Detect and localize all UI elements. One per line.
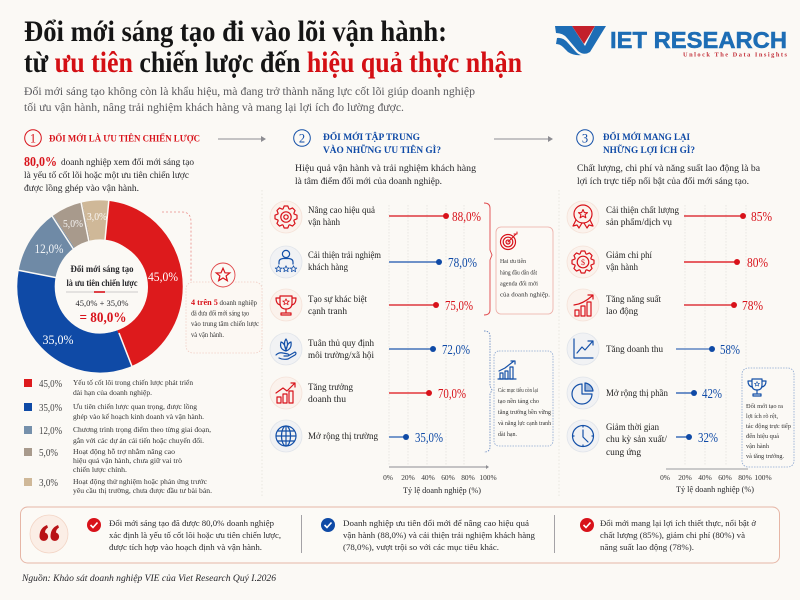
legend: gắn với các dự án cải tiến hoặc chuyển đổi.	[73, 436, 204, 445]
text block: 80% intro: được lồng ghép vào vận hành.	[24, 183, 139, 193]
chart row: cycle time 32%: Giảm thời gian	[606, 422, 659, 433]
title: Đổi mới sáng tạo đi vào lõi vận hành:	[24, 15, 447, 48]
axis: section 2: 20%	[401, 473, 415, 482]
donut chart: 45,0%	[148, 269, 178, 284]
title	[24, 15, 522, 79]
chart row: revenue growth 70%: Tăng trưởng	[308, 382, 353, 393]
donut chart: 45,0% + 35,0%	[76, 298, 129, 308]
callout: remaining goals	[494, 351, 553, 446]
chart row: market expansion 35%: Mở rộng thị trường	[308, 431, 378, 442]
source note: Nguồn: Khảo sát doanh nghiệp VIE của Viet Research Quý I.2026	[21, 573, 276, 584]
takeaway 3: chất lượng (85%), giảm chi phí (80%) và	[600, 530, 745, 540]
chart row: productivity 78%: lao động	[606, 306, 638, 317]
chart row: cycle time 32%: cung ứng	[606, 447, 641, 458]
chart row: competitive differentiation 75%	[270, 289, 473, 321]
chart row: market share 42%	[567, 377, 722, 409]
legend: Ưu tiên chiến lược quan trọng, được lồng	[73, 403, 197, 411]
legend: 3,0%	[39, 478, 58, 489]
takeaway 1: xác định là yếu tố cốt lõi hoặc ưu tiên chiến lược,	[109, 530, 281, 540]
callout: innovation creates clear benefits: vận hành	[746, 444, 769, 450]
axis: section 3: Tỷ lệ doanh nghiệp (%)	[676, 484, 754, 494]
heading: section 3: NHỮNG LỢI ÍCH GÌ?	[603, 143, 695, 156]
chart row: quality 85%: sản phẩm/dịch vụ	[606, 217, 672, 228]
legend: 45,0%	[39, 379, 62, 390]
chart row: customer experience 78%: khách hàng	[308, 262, 348, 273]
axis: section 3: 0%	[660, 473, 670, 482]
callout: remaining goals: Các mục tiêu còn lại	[498, 387, 538, 394]
donut chart: là ưu tiên chiến lược	[66, 278, 138, 288]
legend: yêu cầu thị trường, chưa được đầu tư bài bản.	[73, 487, 212, 495]
donut chart: = 80,0%	[80, 310, 126, 326]
chart row: productivity 78%: Tăng năng suất	[606, 294, 661, 305]
logo: Viet Research: Unlock The Data Insights	[683, 52, 788, 58]
text block: section 3 description	[577, 163, 761, 187]
chart row: cycle time 32%	[567, 420, 718, 458]
callout: innovation creates clear benefits: tác động trực tiếp	[746, 423, 791, 430]
takeaway 1	[87, 518, 281, 552]
takeaway 3: năng suất lao động (78%).	[600, 542, 694, 552]
donut chart	[17, 199, 178, 369]
chart row: cost 80%: 80%	[747, 255, 768, 270]
callout: top two priorities: Hai ưu tiên	[500, 258, 527, 265]
chart row: revenue growth 70%	[270, 377, 466, 409]
text block: 80% intro: là yếu tố cốt lõi hoặc một ưu tiên chiến lược	[24, 170, 189, 180]
axis: section 3	[660, 469, 772, 494]
chart row: revenue 58%	[567, 333, 740, 365]
text block: section 2 description: Hiệu quả vận hành và trải nghiệm khách hàng	[295, 164, 476, 174]
chart row: customer experience 78%	[270, 246, 477, 278]
takeaway 3	[580, 518, 756, 552]
text block: 80% intro	[24, 155, 195, 193]
axis: section 2	[383, 465, 497, 495]
axis: section 2: 100%	[479, 473, 497, 482]
chart row: competitive differentiation 75%: Tạo sự khác biệt	[308, 294, 367, 305]
logo: Viet Research	[555, 26, 788, 58]
legend: Yếu tố cốt lõi trong chiến lược phát triển	[73, 378, 193, 387]
title: từ ưu tiên chiến lược đến hiệu quả thực nhận	[24, 46, 522, 79]
bracket: remaining goals	[484, 331, 492, 452]
takeaway 2	[321, 518, 536, 552]
callout: top two priorities: của doanh nghiệp.	[500, 292, 550, 298]
donut chart: 3,0%	[87, 211, 107, 223]
text block: section 3 description: Chất lượng, chi phí và năng suất lao động là ba	[577, 163, 761, 174]
heading: section 2: VÀO NHỮNG ƯU TIÊN GÌ?	[323, 143, 441, 156]
chart row: cycle time 32%: chu kỳ sản xuất/	[606, 434, 667, 445]
callout: top two priorities: agenda đổi mới	[500, 280, 538, 288]
chart row: competitive differentiation 75%: cạnh tranh	[308, 306, 347, 317]
callout: innovation creates clear benefits: đến hiệu quả	[746, 433, 779, 440]
chart row: productivity 78%: 78%	[742, 298, 763, 313]
chart row: regulatory compliance 72%: môi trường/xã hội	[308, 350, 374, 361]
chart row: market share 42%: 42%	[702, 386, 722, 401]
chart row: quality 85%: Cải thiện chất lượng	[606, 205, 679, 216]
takeaway 1: Đổi mới sáng tạo đã được 80,0% doanh nghiệp	[109, 518, 275, 528]
subtitle: Đổi mới sáng tạo không còn là khẩu hiệu, mà đang trở thành năng lực cốt lõi giúp doanh nghiệp	[24, 85, 475, 98]
donut chart: 35,0%	[42, 332, 74, 347]
callout: 4 of 5 businesses: và vận hành.	[191, 331, 224, 339]
chart row: revenue 58%: Tăng doanh thu	[606, 344, 663, 355]
heading: section 2	[294, 130, 441, 156]
panel: section 1 strategic priority	[17, 130, 262, 495]
axis: section 3: 80%	[738, 473, 752, 482]
legend: Hoạt động hỗ trợ nhằm nâng cao	[73, 447, 175, 456]
panel: key takeaways	[20, 507, 780, 563]
arrow: section 1 to 2	[218, 136, 266, 142]
chart row: cost 80%	[567, 246, 768, 278]
chart row: productivity 78%	[567, 289, 763, 321]
heading: section 3	[577, 130, 695, 156]
takeaway 1: được tích hợp vào hoạch định và vận hành.	[109, 542, 262, 552]
callout: 4 of 5 businesses: đã đưa đổi mới sáng tạo	[191, 310, 249, 318]
heading: section 2: ĐỔI MỚI TẬP TRUNG	[323, 130, 420, 143]
chart row: cycle time 32%: 32%	[698, 430, 718, 445]
legend: ghép vào kế hoạch kinh doanh và vận hành.	[73, 413, 204, 421]
chart row: market expansion 35%	[270, 420, 443, 452]
heading: section 3: ĐỔI MỚI MANG LẠI	[603, 130, 690, 143]
legend	[24, 378, 212, 495]
callout: remaining goals: tạo nền tảng cho	[498, 398, 539, 405]
callout: 4 of 5 businesses: 4 trên 5 doanh nghiệp	[191, 297, 257, 307]
axis: section 3: 100%	[754, 473, 772, 482]
chart row: quality 85%	[567, 201, 772, 233]
chart row: revenue 58%: 58%	[720, 342, 740, 357]
donut chart: 5,0%	[63, 218, 83, 230]
chart row: operational efficiency 88%	[270, 201, 481, 233]
chart row: cost 80%: vận hành	[606, 262, 638, 273]
legend: 5,0%	[39, 448, 58, 459]
icon: quotation mark	[30, 515, 68, 553]
text block: 80% intro: doanh nghiệp xem đổi mới sáng tạo	[61, 157, 195, 167]
chart row: regulatory compliance 72%: Tuân thủ quy định	[308, 338, 374, 349]
chart row: regulatory compliance 72%	[270, 333, 470, 365]
legend: 12,0%	[39, 426, 62, 437]
axis: section 2: 40%	[421, 473, 435, 482]
callout: remaining goals: dài hạn.	[498, 431, 517, 438]
chart row: customer experience 78%: 78,0%	[448, 255, 477, 270]
callout: innovation creates clear benefits: và tăng trưởng.	[746, 454, 784, 460]
panel: section 2 focus areas	[270, 130, 553, 495]
callout: top two priorities: hàng đầu dẫn dắt	[500, 270, 537, 276]
chart row: operational efficiency 88%: vận hành	[308, 217, 340, 228]
chart row: quality 85%: 85%	[751, 209, 772, 224]
chart row: market share 42%: Mở rộng thị phần	[606, 388, 668, 399]
callout: innovation creates clear benefits	[742, 368, 794, 467]
panel: section 3 benefits	[567, 130, 794, 494]
legend: chiến lược chính.	[73, 466, 127, 474]
heading: section 1: ĐỔI MỚI LÀ ƯU TIÊN CHIẾN LƯỢC	[49, 132, 200, 144]
donut chart: Đổi mới sáng tạo	[70, 264, 134, 274]
axis: section 3: 20%	[678, 473, 692, 482]
chart row: competitive differentiation 75%: 75,0%	[445, 298, 473, 313]
axis: section 3: 60%	[718, 473, 732, 482]
chart row: regulatory compliance 72%: 72,0%	[442, 342, 470, 357]
axis: section 2: 80%	[461, 473, 475, 482]
logo: Viet Research: IET RESEARCH	[610, 27, 787, 53]
callout: 4 of 5 businesses: vào trung tâm chiến lược	[191, 320, 259, 328]
text block: section 3 description: lợi ích trực tiếp nổi bật của đổi mới sáng tạo.	[577, 176, 749, 187]
callout: innovation creates clear benefits: Đổi mới tạo ra	[746, 403, 783, 410]
subtitle	[24, 85, 475, 114]
takeaway 3: Đổi mới mang lại lợi ích thiết thực, nổi bật ở	[600, 518, 756, 528]
callout: remaining goals: tăng trưởng bền vững	[498, 409, 551, 416]
subtitle: tối ưu vận hành, nâng trải nghiệm khách hàng và mang lại lợi ích đo lường được.	[24, 101, 404, 114]
callout: remaining goals: và năng lực cạnh tranh	[498, 420, 552, 427]
chart row: revenue growth 70%: doanh thu	[308, 394, 346, 405]
takeaway 2: (78,0%), vượt trội so với các mục tiêu khác.	[343, 542, 499, 552]
text block: section 2 description	[295, 164, 476, 187]
callout: top two priorities	[496, 227, 553, 314]
legend: Chương trình trọng điểm theo từng giai đoạn,	[73, 425, 211, 434]
heading: section 1	[25, 130, 200, 146]
bracket: top two priorities	[484, 203, 492, 315]
axis: section 2: 60%	[441, 473, 455, 482]
legend: 35,0%	[39, 403, 62, 414]
axis: section 2: 0%	[383, 473, 393, 482]
chart row: cost 80%: $	[581, 258, 585, 267]
donut chart: 12,0%	[34, 241, 64, 256]
text block: 80% intro: 80,0%	[24, 155, 57, 170]
callout: innovation creates clear benefits: lợi ích rõ rệt,	[746, 414, 778, 420]
axis: section 2: Tỷ lệ doanh nghiệp (%)	[403, 485, 481, 495]
heading: section 3: 3	[582, 132, 588, 146]
legend: Hoạt động thử nghiệm hoặc phản ứng trước	[73, 478, 207, 486]
chart row: revenue growth 70%: 70,0%	[438, 386, 466, 401]
takeaway 2: Doanh nghiệp ưu tiên đổi mới để nâng cao hiệu quả	[343, 518, 529, 528]
chart row: operational efficiency 88%: 88,0%	[452, 209, 481, 224]
takeaway 2: vận hành (88,0%) và cải thiện trải nghiệm khách hàng	[343, 530, 536, 540]
chart row: customer experience 78%: Cải thiện trải nghiệm	[308, 250, 381, 261]
chart row: market expansion 35%: 35,0%	[415, 430, 443, 445]
chart row: cost 80%: Giảm chi phí	[606, 250, 652, 261]
axis: section 3: 40%	[698, 473, 712, 482]
legend: hiệu quả vận hành, chưa giữ vai trò	[73, 457, 182, 465]
text block: section 2 description: là tâm điểm đổi mới của doanh nghiệp.	[295, 176, 442, 187]
chart row: operational efficiency 88%: Nâng cao hiệu quả	[308, 205, 376, 216]
heading: section 1: 1	[30, 132, 36, 146]
arrow: section 2 to 3	[494, 136, 553, 142]
legend: dài hạn của doanh nghiệp.	[73, 389, 152, 397]
heading: section 2: 2	[299, 132, 305, 146]
callout: 4 of 5 businesses	[162, 212, 262, 353]
